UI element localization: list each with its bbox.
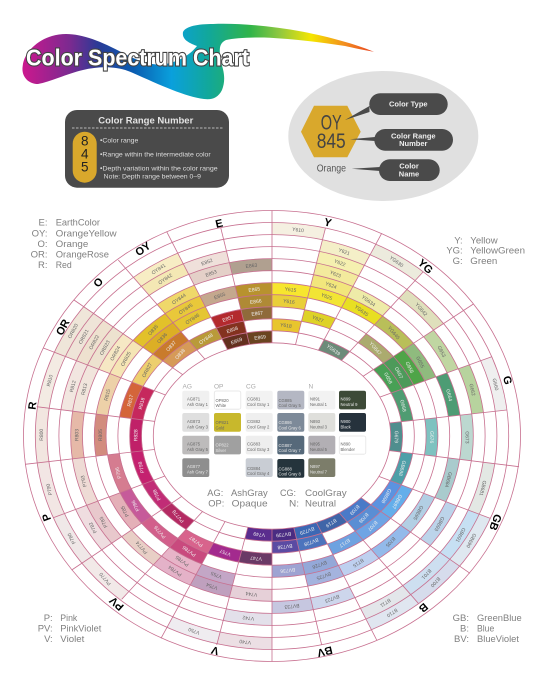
swatches: cool gray light (246, 391, 273, 477)
swatch column headers: OP (214, 383, 223, 390)
sector: OR82 (55, 307, 162, 386)
sector: G65: G653 (436, 345, 447, 359)
legend: top right: Yellow (470, 235, 498, 246)
panel: how to read a color code: Color (399, 161, 419, 170)
swatches: opaque: White (216, 403, 227, 408)
sector: R80: R803 (74, 429, 80, 441)
legend: bottom left: PV: (38, 623, 53, 634)
family labels around the wheel: V (209, 643, 220, 657)
sector: R81: R817 (126, 394, 135, 407)
legend: top left: EarthColor (56, 217, 100, 228)
sector: YG63: YG635 (353, 304, 369, 318)
sector: Y62: Y622 (333, 259, 346, 268)
swatches: cool gray light: CG882 (247, 419, 261, 424)
legend: bottom left (38, 613, 102, 645)
swatches: ash gray: AG871 (187, 396, 201, 402)
center legend (207, 488, 347, 510)
rainbow swoosh (22, 24, 374, 99)
swatches: cool gray light: CG883 (247, 442, 261, 446)
sector: OR82: OR823 (99, 340, 112, 357)
swatches: opaque (214, 391, 241, 454)
sector: BV72: BV726 (311, 559, 328, 570)
swatches: ash gray: AG875 (187, 442, 201, 446)
legend: bottom left: PinkViolet (60, 623, 102, 634)
swatches: cool gray dark: Cool Gray 6 (278, 426, 302, 430)
sector: B71: B717 (338, 537, 351, 548)
panel: color range number: Color Range Number (98, 116, 194, 126)
sector: Y62: Y624 (324, 281, 338, 291)
panel: color range number (65, 110, 229, 188)
sector: V74 (218, 528, 272, 649)
sector: G66: G660 (491, 378, 499, 391)
sector: Y61: Y610 (292, 227, 304, 234)
sector: P78: P786 (131, 499, 141, 512)
legend: top left: OY: (32, 228, 48, 239)
panel: how to read a color code: Orange (317, 162, 346, 174)
swatches: ash gray: Ash Gray 5 (187, 447, 209, 452)
sector: E85: E852 (201, 258, 214, 267)
ring grid and dividers (24, 210, 520, 662)
panel: how to read a color code: Number (399, 139, 428, 148)
legend: top right: G: (453, 256, 463, 267)
sector: OR82: OR824 (110, 345, 122, 362)
family labels around the wheel: B (416, 600, 430, 614)
sector: PV77: PV776 (153, 524, 168, 539)
sector: B70: B709 (348, 503, 360, 516)
sector: B71: B711 (379, 597, 391, 608)
sector: Y62 (302, 240, 370, 328)
family labels around the wheel (27, 216, 514, 659)
sector: G65 (374, 330, 458, 392)
sector: GB68: GB684 (443, 471, 453, 488)
sector: Y62: Y627 (311, 315, 324, 325)
sector: PV77: PV770 (98, 571, 113, 586)
legend: bottom right: GreenBlue (477, 613, 522, 624)
swatches: neutral light: Neutral 3 (310, 424, 328, 429)
sector: G65: G655 (414, 356, 425, 369)
swatches: neutral light (308, 391, 335, 477)
panel: color range number: 8 (81, 134, 88, 149)
sector: YG63: YG639 (325, 343, 341, 358)
sector: V75 (168, 543, 242, 643)
legend: bottom right: BV: (454, 634, 469, 645)
swatches: neutral dark: N890 (340, 442, 351, 446)
swatches: cool gray dark: Cool Gray 8 (278, 472, 302, 476)
sector: P78: P782 (88, 521, 99, 534)
legend: top left: Orange (56, 239, 88, 250)
panel: color range number: •Depth variation within the color range (100, 165, 218, 172)
sector: BV73: BV738 (277, 542, 293, 550)
sector: V75: V750 (187, 625, 201, 635)
swatches: neutral light: Neutral 7 (310, 470, 328, 475)
swatches: cool gray light: Cool Gray 3 (247, 447, 270, 452)
swatches: opaque: Gold (216, 426, 225, 430)
panel: how to read a color code (288, 71, 478, 201)
center legend: Neutral (305, 499, 336, 510)
sector: P79: P798 (138, 461, 146, 474)
family labels around the wheel: R (27, 401, 39, 410)
sector: BV73: BV733 (284, 602, 300, 610)
swatches: opaque: Silver (216, 448, 227, 453)
sector: G66: G662 (467, 383, 476, 397)
sector: Y61: Y615 (284, 287, 297, 294)
sector: PV78: PV787 (189, 534, 204, 548)
sector: GB69: GB697 (390, 493, 403, 510)
sector: B71 (316, 513, 418, 629)
sector: E86: E866 (250, 298, 262, 306)
sector: Y62: Y621 (337, 247, 351, 257)
sector: OY84 (134, 254, 222, 350)
sector: B71: B710 (385, 607, 398, 618)
sector: BV73: BV736 (280, 566, 296, 574)
panel: how to read a color code: 845 (317, 130, 346, 153)
legend: bottom left: P: (44, 613, 53, 624)
sector: OY84: OY846 (185, 312, 201, 326)
swatches: neutral light: Neutral 1 (310, 402, 328, 407)
swatches: ash gray (182, 391, 209, 477)
family labels around the wheel: P (40, 512, 54, 523)
sector: PV78 (154, 530, 213, 584)
sector: P79 (38, 451, 153, 517)
sector: R81: R815 (103, 388, 112, 402)
swatches: opaque: OP820 (216, 398, 229, 403)
sector: BV72: BV725 (315, 570, 332, 581)
sector: YG64: YG645 (386, 325, 401, 341)
sector: G67 (390, 414, 473, 460)
swatches: neutral light: N891 (310, 396, 321, 402)
family labels around the wheel: OY (133, 240, 154, 259)
sector: B71: B719 (324, 517, 337, 528)
swatches: ash gray: Ash Gray 3 (187, 424, 209, 429)
sector: P78 (54, 480, 171, 562)
swatches: cool gray light: CG884 (247, 466, 261, 471)
center legend: AG: (207, 488, 223, 499)
swatches: neutral light: N893 (310, 419, 321, 424)
sector: O83 (134, 314, 196, 368)
sector: GB69: GB693 (433, 515, 445, 532)
legend: bottom right: Blue (477, 623, 494, 634)
swatches: cool gray dark (277, 391, 304, 478)
legend: bottom right: BlueViolet (477, 634, 519, 645)
sector: OY84: OY844 (171, 293, 188, 306)
sector: GB69: GB695 (411, 504, 424, 521)
sector: B70 (340, 498, 459, 603)
family labels around the wheel: Y (323, 216, 333, 230)
legend: top left: R: (38, 260, 48, 271)
swatches: cool gray dark: CG887 (278, 443, 292, 448)
sector: Y61: Y616 (283, 298, 295, 306)
sector: O83: O835 (147, 324, 160, 337)
sector: P78: P783 (99, 515, 109, 528)
sector: V75: V757 (219, 547, 232, 557)
sector: R81: R812 (69, 380, 78, 393)
legend: top right: Y: (454, 235, 463, 246)
family labels around the wheel: E (214, 217, 224, 231)
family labels around the wheel: O (91, 275, 106, 290)
legend: top right: YellowGreen (470, 246, 525, 257)
panel: color range number: 5 (81, 159, 88, 174)
swatches: neutral dark: Neutral 9 (340, 402, 358, 407)
swatches: cool gray dark: CG885 (278, 398, 292, 403)
center legend: Opaque (232, 499, 268, 510)
swatches: neutral dark: Blender (340, 447, 356, 452)
sector: R81 (38, 353, 154, 420)
swatches: cool gray dark: Cool Gray 5 (278, 403, 302, 408)
legend: top right: Green (470, 256, 497, 267)
sector: G65: G657 (393, 366, 404, 380)
panel: color range number: Note: Depth range between 0–9 (104, 173, 201, 180)
legend: top right (446, 235, 525, 267)
legend: bottom left: Violet (60, 634, 85, 645)
legend: bottom right: B: (460, 623, 469, 634)
swatches: cool gray dark: CG886 (278, 420, 292, 425)
sector: OY84: OY842 (158, 273, 174, 286)
sector: BV72: BV723 (324, 593, 340, 604)
sector: B70: B701 (420, 567, 432, 580)
sector: B71: B715 (351, 557, 365, 568)
sector: Y61: Y618 (280, 322, 292, 330)
sector: P79: P793 (80, 474, 89, 487)
swatch column headers (182, 383, 314, 390)
sector: G67: G673 (464, 431, 470, 444)
swatches: neutral dark: N900 (340, 419, 351, 424)
sector: V75: V755 (210, 569, 223, 579)
sector: BV73: BV739 (275, 530, 291, 538)
swatches: ash gray: AG873 (187, 419, 201, 424)
sector: P79: P796 (115, 466, 123, 479)
sector: PV78: PV785 (174, 554, 190, 567)
sector: P78: P788 (152, 488, 163, 501)
sector: V74: V747 (250, 554, 262, 562)
family labels around the wheel: GB (486, 512, 503, 532)
swatches: cool gray dark: Cool Gray 7 (278, 448, 302, 453)
sector: YG63: YG630 (388, 255, 404, 269)
sector: PV77 (82, 504, 194, 600)
sector: YG64: YG647 (368, 341, 382, 357)
sector: BV72: BV728 (303, 536, 319, 547)
legend: top left: E: (39, 217, 48, 228)
sector: GB68 (390, 452, 494, 514)
sector: OY84: OY845 (178, 302, 194, 316)
sector: YG63: YG634 (360, 294, 376, 308)
sector: Y61 (272, 223, 325, 332)
sector: GB68: GB688 (397, 460, 406, 477)
family labels around the wheel: OR (54, 317, 73, 338)
legend: top right: YG: (446, 246, 463, 257)
sector: E86: E865 (248, 286, 261, 294)
swatches: neutral light: Neutral 5 (310, 447, 328, 452)
sector: E86 (230, 259, 272, 344)
legend: top left: OR: (31, 249, 48, 260)
sector: R80: R805 (98, 429, 104, 441)
sector: YG63 (319, 244, 422, 360)
sector: BV72 (294, 523, 354, 610)
sector: G65: G658 (382, 372, 393, 385)
legend: top left (31, 217, 117, 271)
sector: GB69: GB698 (379, 487, 392, 504)
sector: B70: B708 (357, 511, 369, 524)
sector: PV77: PV774 (135, 539, 149, 555)
panel: color range number: •Color range (100, 138, 139, 145)
center legend: N: (289, 499, 299, 510)
sector: V74: V740 (239, 638, 252, 645)
center legend: CoolGray (305, 488, 347, 499)
sector: G65: G656 (404, 361, 415, 375)
sector: R80 (36, 407, 143, 462)
sector: O83: O837 (165, 340, 178, 353)
swatches: ash gray: AG877 (187, 464, 201, 469)
swatch column headers: AG (182, 383, 192, 390)
swatches: neutral light: N895 (310, 442, 321, 446)
legend: top left: O: (37, 239, 48, 250)
sector: GB69: GB690 (464, 532, 477, 549)
sector: OR82: OR827 (141, 362, 154, 379)
sector: O83: O838 (174, 348, 187, 361)
sector: V74: V749 (253, 530, 265, 538)
sector: BV72: BV729 (299, 525, 315, 536)
swatches: cool gray light: Cool Gray 4 (247, 471, 270, 476)
swatches: neutral dark: N899 (340, 396, 351, 402)
sector: Y62: Y625 (320, 292, 333, 302)
sector: Y62: Y623 (329, 270, 342, 280)
swatches: ash gray: Ash Gray 1 (187, 402, 209, 407)
sector: GB68: GB681 (477, 480, 487, 497)
sector: E85: E859 (230, 337, 243, 347)
panel: how to read a color code: OY (321, 111, 342, 134)
swatch column headers: N (308, 383, 314, 390)
family labels around the wheel: BV (315, 643, 333, 659)
sector: OR82: OR821 (78, 328, 91, 345)
swatches: cool gray light: Cool Gray 2 (247, 424, 270, 429)
sector: G67: G676 (428, 431, 434, 443)
sector: B70: B707 (366, 519, 378, 532)
center legend: CG: (280, 488, 296, 499)
sector: PV77: PV778 (171, 508, 186, 524)
sector: E85: E853 (205, 269, 218, 279)
legend: top left: OrangeRose (56, 249, 109, 260)
sector: OR82: OR825 (120, 351, 133, 368)
sector: R81: R818 (138, 397, 147, 410)
sector: GB69 (372, 481, 490, 566)
sector: GB69: GB691 (454, 526, 466, 543)
swatches: neutral dark (339, 391, 366, 454)
sector: P78: P785 (120, 504, 131, 518)
swatches: neutral light: N897 (310, 464, 321, 469)
sector: V74: V742 (242, 614, 255, 621)
panel: how to read a color code: Name (399, 169, 419, 178)
sector: E85 (184, 252, 249, 350)
sector: G66: G664 (444, 389, 453, 402)
panel: color range number: 4 (81, 147, 89, 162)
legend: bottom right: GB: (453, 613, 469, 624)
panel: how to read a color code: Color Range (391, 131, 436, 140)
sector: YG64 (358, 290, 443, 362)
sector: R81: R813 (80, 383, 89, 396)
family labels around the wheel: PV (107, 593, 126, 613)
sector: E85: E855 (213, 292, 227, 301)
swatches: opaque: OP822 (216, 442, 229, 448)
sector: P78: P780 (67, 532, 77, 545)
sector: R81: R810 (46, 374, 55, 387)
sector: O83: O836 (156, 332, 169, 345)
legend: bottom left: V: (44, 634, 53, 645)
swatches: cool gray dark: CG888 (278, 466, 292, 472)
legend: top left: Red (56, 260, 72, 271)
swatches: cool gray light: CG881 (247, 396, 261, 402)
center legend: OP: (208, 499, 224, 510)
center legend: AshGray (231, 488, 268, 499)
color wheel (24, 210, 520, 662)
sector: PV78: PV786 (182, 544, 197, 558)
sector: E86: E863 (245, 263, 258, 270)
sector: OR82: OR822 (88, 334, 101, 351)
sector: V75: V754 (205, 581, 219, 591)
family labels around the wheel: G (500, 375, 514, 386)
swatches: cool gray light: Cool Gray 1 (247, 402, 270, 407)
swatches: neutral dark: Black (340, 424, 352, 429)
sector: OR82: OR820 (67, 323, 80, 340)
sector: R80: R800 (39, 429, 45, 441)
swatches: opaque: OP821 (216, 420, 229, 425)
legend: bottom right (453, 613, 522, 645)
swatch column headers: CG (246, 383, 256, 390)
sector: G67: G679 (393, 431, 399, 443)
panel: color range number: •Range within the intermediate color (100, 151, 212, 158)
sector: V74: V744 (245, 590, 258, 597)
sector: G66 (392, 358, 506, 422)
title: Color Spectrum Chart (26, 44, 249, 70)
sector: P79: P790 (45, 483, 54, 496)
sector: E85: E857 (222, 314, 235, 324)
sector: B70: B705 (384, 535, 396, 548)
sector: E86: E867 (251, 310, 264, 318)
legend: top left: OrangeYellow (56, 228, 117, 239)
sector: BV73 (272, 528, 313, 613)
legend: bottom left: Pink (60, 613, 78, 624)
sector: R80: R828 (133, 429, 139, 441)
family labels around the wheel: YG (415, 257, 435, 277)
sector: YG64: YG642 (413, 302, 428, 318)
sector: B70: B700 (429, 575, 441, 588)
sector: E86: E869 (254, 334, 267, 342)
sector: OY84: OY841 (151, 263, 167, 276)
sector: E85: E858 (226, 326, 239, 335)
swatches: ash gray: Ash Gray 7 (187, 470, 209, 475)
sector: PV78: PV784 (167, 563, 183, 577)
sector: OY84: OY848 (198, 332, 215, 346)
panel: how to read a color code: Color Type (389, 100, 428, 109)
sector: G66: G668 (398, 399, 407, 413)
